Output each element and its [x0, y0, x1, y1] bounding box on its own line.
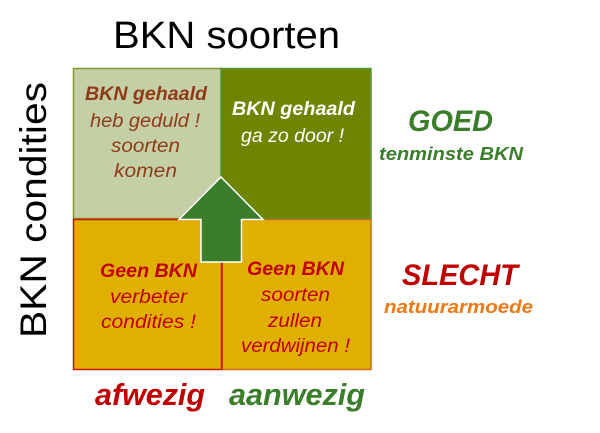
panel: top left, BKN gehaald heb geduld: heb geduld ! [90, 111, 201, 132]
panel: bottom right, Geen BKN soorten zullen verdwijnen: verdwijnen ! [241, 336, 351, 357]
label: GOED tenminste BKN [379, 105, 524, 164]
panel: top right, BKN gehaald ga zo door: ga zo door ! [241, 126, 345, 147]
panel: bottom right, Geen BKN soorten zullen verdwijnen: Geen BKN [247, 259, 345, 280]
icon: upward green arrow [179, 177, 263, 262]
panel: bottom right, Geen BKN soorten zullen verdwijnen [222, 220, 371, 370]
panel: bottom right, Geen BKN soorten zullen verdwijnen: zullen [267, 311, 322, 332]
panel: bottom right, Geen BKN soorten zullen verdwijnen: soorten [261, 285, 330, 306]
label: SLECHT natuurarmoede [384, 259, 533, 317]
panel: top left, BKN gehaald heb geduld: soorten [111, 136, 180, 157]
label: aanwezig: aanwezig [229, 377, 365, 412]
panel: bottom left, Geen BKN verbeter condities [74, 220, 222, 370]
label: afwezig: afwezig [95, 377, 205, 412]
title: BKN soorten: BKN soorten [113, 15, 340, 57]
panel: bottom left, Geen BKN verbeter condities: verbeter [110, 287, 188, 308]
panel: top left, BKN gehaald heb geduld [74, 68, 222, 218]
panel: top right, BKN gehaald ga zo door: BKN gehaald [232, 99, 355, 120]
panel: top left, BKN gehaald heb geduld: komen [114, 161, 177, 182]
label: SLECHT natuurarmoede: SLECHT [402, 259, 521, 292]
label: SLECHT natuurarmoede: natuurarmoede [384, 297, 533, 317]
panel: bottom left, Geen BKN verbeter condities: condities ! [101, 312, 197, 333]
panel: top right, BKN gehaald ga zo door [221, 68, 371, 218]
panel: top left, BKN gehaald heb geduld: BKN gehaald [85, 84, 207, 105]
label: GOED tenminste BKN: tenminste BKN [379, 144, 524, 164]
label: GOED tenminste BKN: GOED [408, 105, 493, 138]
axis label: BKN condities: BKN condities [13, 82, 54, 338]
panel: bottom left, Geen BKN verbeter condities: Geen BKN [100, 261, 198, 282]
